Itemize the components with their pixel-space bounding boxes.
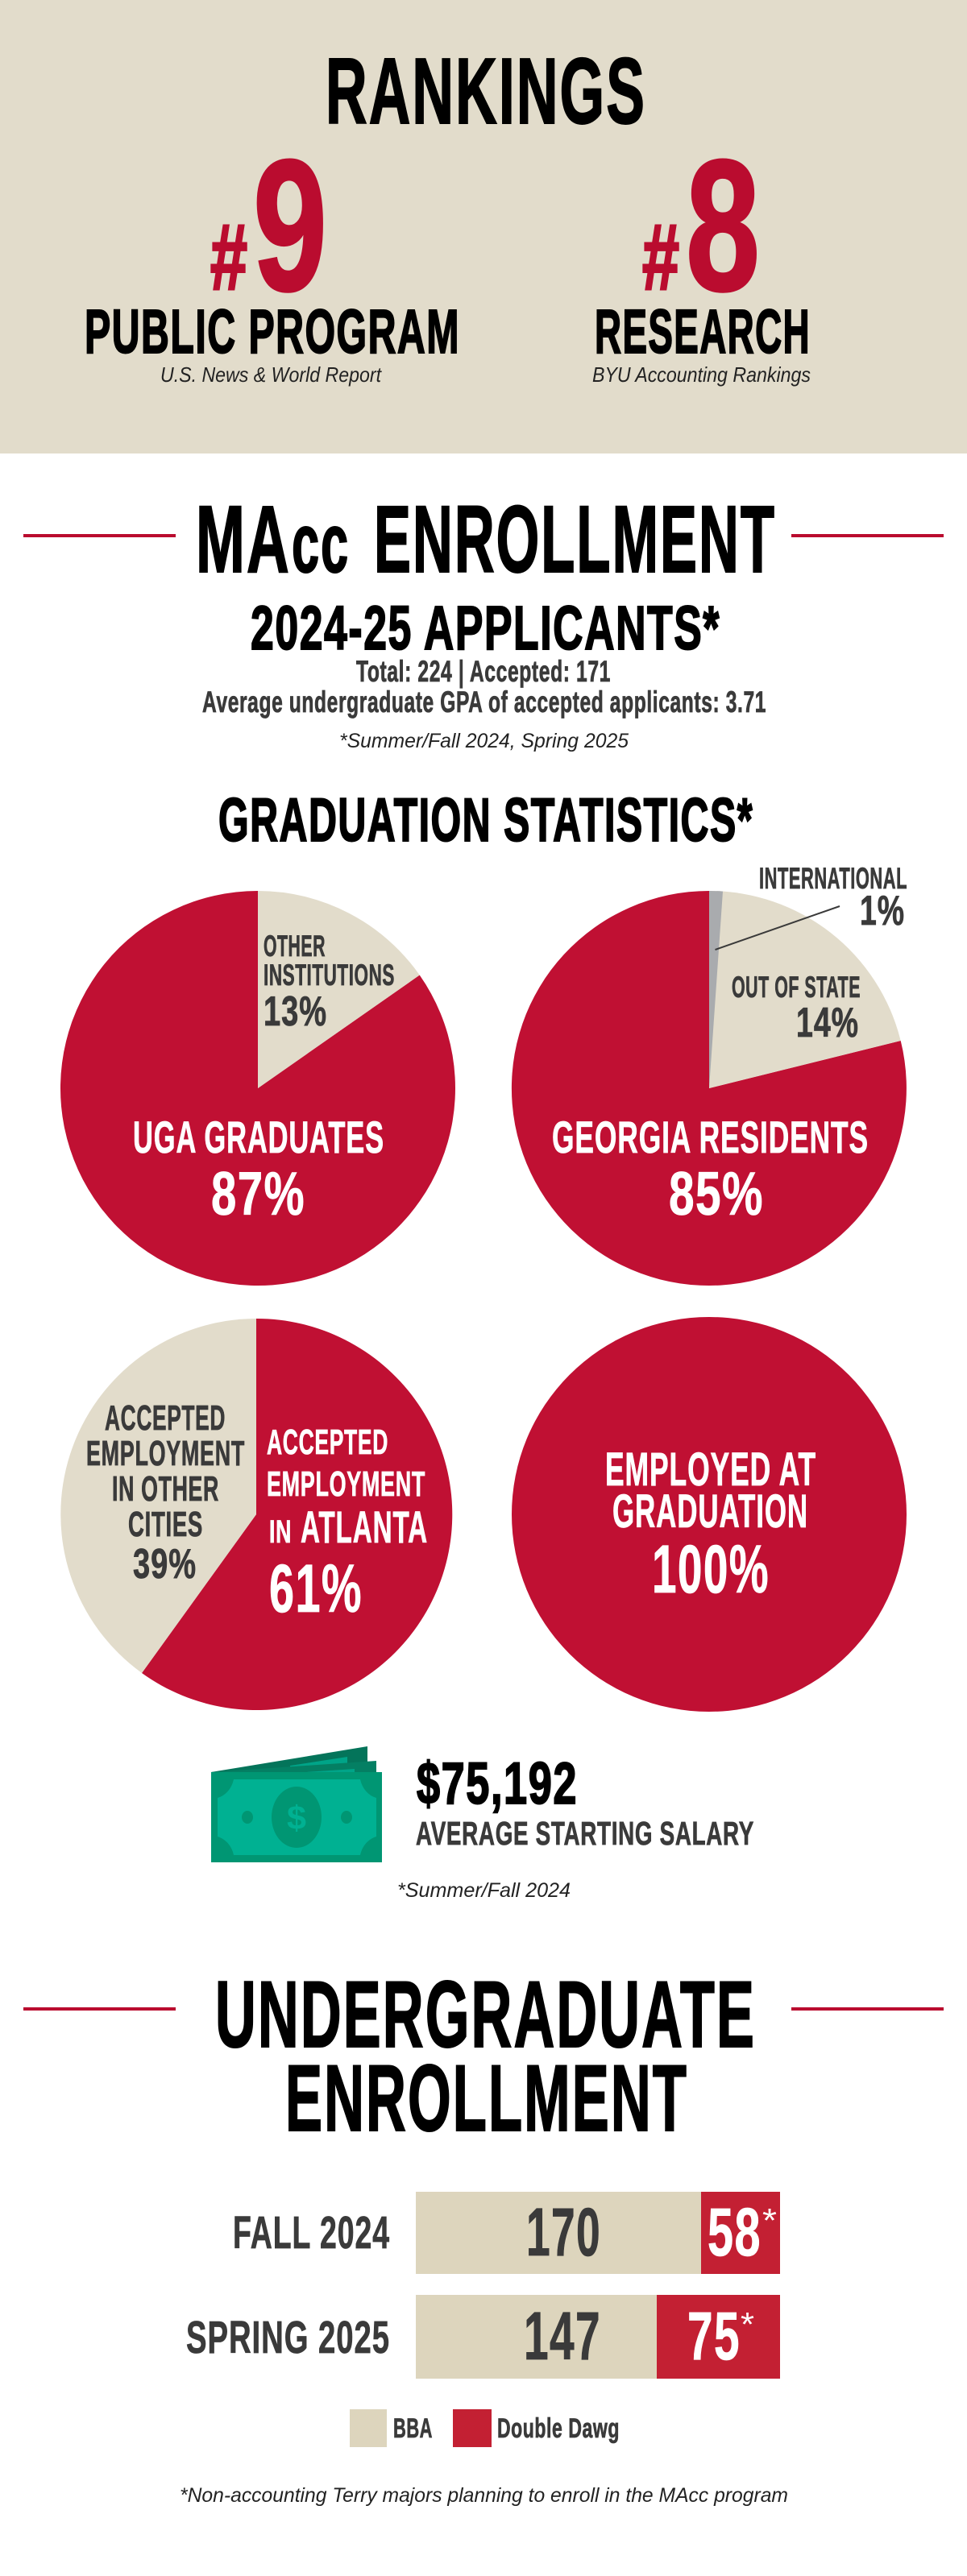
chart: accepted employment pie: EMPLOYMENT	[86, 1434, 245, 1473]
heading: rankings: RANKINGS	[326, 39, 646, 143]
chart: UGA graduates pie	[60, 891, 455, 1286]
chart: employed at graduation pie: EMPLOYED AT	[605, 1443, 816, 1496]
bar chart: enrollment: FALL 2024	[233, 2207, 390, 2259]
chart: Georgia residents pie	[512, 862, 907, 1286]
chart: accepted employment pie: IN	[269, 1514, 292, 1550]
icon: money: $	[287, 1799, 306, 1837]
chart: accepted employment pie: EMPLOYMENT	[267, 1464, 425, 1504]
chart: accepted employment pie: 39%	[133, 1541, 197, 1588]
legend: Double Dawg	[497, 2413, 620, 2444]
stat: #8 research	[592, 122, 811, 387]
stat: #8 research: 8	[686, 122, 760, 330]
chart: employed at graduation pie	[512, 1317, 907, 1712]
chart: UGA graduates pie: OTHER	[264, 930, 326, 963]
heading: undergraduate enrollment: ENROLLMENT	[285, 2045, 688, 2151]
bar chart: enrollment: *	[741, 2305, 754, 2343]
bar chart: enrollment: *	[762, 2201, 777, 2239]
stat: #9 public program: #	[210, 205, 247, 309]
chart: accepted employment pie: ACCEPTED	[105, 1398, 226, 1438]
stat: #9 public program: 9	[253, 122, 327, 330]
stat: #8 research: #	[642, 205, 679, 309]
chart: accepted employment pie: IN OTHER	[112, 1469, 219, 1509]
footnote: applicants: *Summer/Fall 2024, Spring 2025	[339, 730, 629, 752]
legend	[350, 2409, 620, 2447]
chart: accepted employment pie	[60, 1319, 452, 1710]
bar chart: enrollment: SPRING 2025	[186, 2312, 390, 2363]
stat: starting salary: $75,192	[417, 1751, 578, 1816]
stat: #9 public program: U.S. News & World Report	[160, 362, 383, 387]
text: totals: Total: 224 | Accepted: 171	[356, 655, 611, 689]
stat: starting salary: AVERAGE STARTING SALARY	[416, 1815, 754, 1852]
bar chart: enrollment	[186, 2192, 780, 2379]
chart: Georgia residents pie: 14%	[796, 1000, 859, 1046]
bar chart: enrollment: 75	[687, 2298, 741, 2374]
stat: #9 public program	[85, 122, 460, 387]
heading: undergraduate enrollment	[215, 1961, 756, 2151]
chart: UGA graduates pie: 87%	[211, 1160, 305, 1228]
icon: money	[211, 1746, 382, 1862]
heading: MAcc enrollment	[196, 487, 776, 593]
panel: undergraduate enrollment	[23, 1961, 944, 2507]
footnote: double dawg: *Non-accounting Terry majors planning to enroll in the MAcc program	[180, 2484, 788, 2507]
chart: UGA graduates pie: 13%	[264, 988, 327, 1035]
heading: MAcc enrollment: MA	[196, 487, 291, 593]
panel: MAcc enrollment	[23, 487, 944, 752]
stat: #8 research: BYU Accounting Rankings	[592, 362, 811, 387]
heading: MAcc enrollment: cc	[292, 497, 350, 590]
bar chart: enrollment: 58	[708, 2194, 762, 2270]
chart: Georgia residents pie: 85%	[669, 1160, 764, 1228]
stat: starting salary	[416, 1751, 754, 1852]
chart: employed at graduation pie: GRADUATION	[612, 1485, 808, 1538]
chart: accepted employment pie: ACCEPTED	[267, 1423, 388, 1462]
stat: #9 public program: PUBLIC PROGRAM	[85, 297, 460, 367]
chart: accepted employment pie: 61%	[269, 1551, 363, 1626]
chart: Georgia residents pie: 1%	[860, 888, 905, 934]
chart: UGA graduates pie: UGA GRADUATES	[133, 1112, 384, 1162]
chart: Georgia residents pie: OUT OF STATE	[732, 971, 861, 1004]
bar chart: enrollment: 170	[526, 2194, 601, 2270]
stat: #8 research: RESEARCH	[595, 297, 811, 367]
chart: accepted employment pie: ATLANTA	[301, 1501, 428, 1552]
subheading: applicants: 2024-25 APPLICANTS*	[251, 594, 720, 663]
panel: rankings	[0, 0, 967, 453]
footnote: salary: *Summer/Fall 2024	[397, 1879, 571, 1902]
legend: BBA	[393, 2413, 433, 2444]
bar chart: enrollment: 147	[524, 2298, 601, 2374]
chart: accepted employment pie: CITIES	[128, 1505, 203, 1544]
chart: employed at graduation pie: 100%	[652, 1531, 770, 1607]
chart: UGA graduates pie: INSTITUTIONS	[264, 959, 395, 992]
